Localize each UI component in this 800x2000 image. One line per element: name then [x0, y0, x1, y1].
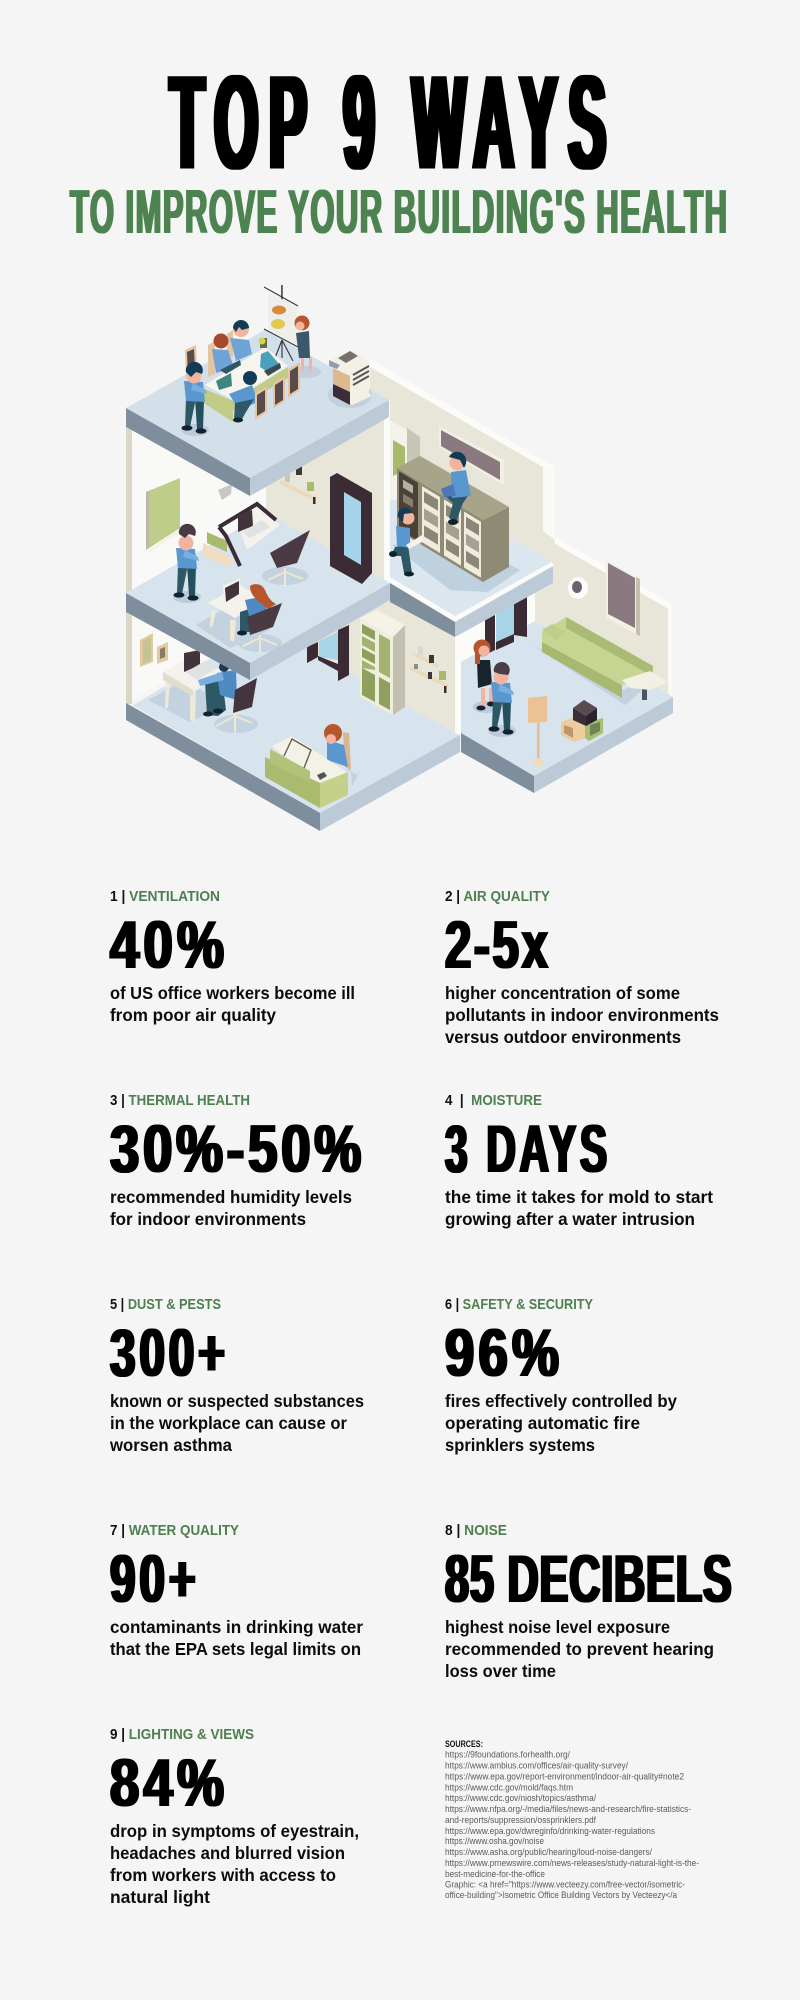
wall: second floor	[126, 340, 390, 593]
heading: 4 | MOISTURE	[445, 1092, 542, 1109]
stat: 40%	[110, 907, 224, 982]
description: contaminants in drinking water	[110, 1617, 363, 1637]
office chair: second floor	[238, 603, 282, 653]
floor: ground	[132, 625, 460, 813]
office chair: ground floor	[214, 678, 258, 733]
reception desk	[265, 724, 358, 808]
person: seated front	[229, 371, 258, 422]
wall pictures	[140, 633, 168, 667]
description	[445, 1187, 713, 1229]
description: highest noise level exposure	[445, 1617, 670, 1637]
description: recommended to prevent hearing	[445, 1639, 714, 1659]
sources: https://www.epa.gov/report-environment/indoor-air-quality#note2	[445, 1772, 684, 1782]
stat: 2-5x	[445, 908, 548, 983]
sources: office-building">Isometric Office Building Vectors by Vecteezy</a	[445, 1890, 678, 1901]
slab: second floor	[126, 583, 390, 680]
description: higher concentration of some	[445, 983, 680, 1003]
subtitle: TO IMPROVE YOUR BUILDING'S HEALTH	[70, 179, 727, 247]
meeting table	[202, 338, 288, 422]
description: that the EPA sets legal limits on	[110, 1639, 361, 1659]
door: second floor	[330, 473, 372, 584]
description	[445, 1617, 714, 1681]
floor: server room	[390, 470, 553, 617]
bookcase	[360, 610, 405, 715]
heading: 8 | NOISE	[445, 1522, 507, 1539]
wall: lounge white return	[461, 590, 535, 662]
sources: and-reports/suppression/ossprinklers.pdf	[445, 1815, 596, 1826]
heading: 2 | AIR QUALITY	[445, 888, 550, 905]
sofa	[532, 617, 653, 705]
description: headaches and blurred vision	[110, 1843, 345, 1863]
stat: 90+	[110, 1542, 196, 1617]
slab: lounge	[461, 697, 673, 793]
door: ground floor	[307, 625, 349, 681]
description: sprinklers systems	[445, 1435, 595, 1455]
stat: 30%-50%	[110, 1111, 361, 1186]
person: man with box in server room	[389, 508, 424, 576]
floor: lounge	[461, 621, 673, 776]
description: operating automatic fire	[445, 1413, 640, 1433]
sources: https://www.osha.gov/noise	[445, 1836, 544, 1847]
wall: top tan edge	[126, 426, 132, 436]
description: the time it takes for mold to start	[445, 1187, 713, 1207]
panel: 8 noise	[445, 1522, 732, 1681]
person: man standing top floor	[181, 362, 209, 436]
panel: 5 dust and pests	[109, 1296, 364, 1455]
description	[445, 1391, 677, 1455]
icon: wall clock lounge	[568, 577, 588, 599]
chairs: front row	[255, 362, 300, 420]
description: worsen asthma	[109, 1435, 232, 1455]
side table	[622, 671, 668, 700]
sources: https://9foundations.forhealth.org/	[445, 1750, 570, 1760]
person: man at ground floor desk	[198, 662, 237, 716]
presentation board	[264, 285, 298, 361]
description: natural light	[110, 1887, 210, 1907]
window: server room	[439, 426, 504, 485]
heading: 6 | SAFETY & SECURITY	[445, 1296, 593, 1313]
stat: 96%	[445, 1315, 559, 1390]
description	[110, 1821, 359, 1907]
description: from workers with access to	[110, 1865, 336, 1885]
sources: https://www.cdc.gov/mold/faqs.htm	[445, 1782, 573, 1794]
office chair: corner desk	[262, 530, 310, 586]
sources: SOURCES:	[445, 1739, 483, 1750]
sources: https://www.ambius.com/offices/air-quality-survey/	[445, 1760, 628, 1772]
icon: wall clock second floor	[218, 484, 232, 500]
stat: 85 DECIBELS	[445, 1542, 732, 1617]
window: green second floor	[146, 478, 180, 553]
description: fires effectively controlled by	[445, 1391, 677, 1411]
desk: second floor workstation	[196, 578, 270, 648]
sources	[445, 1739, 699, 1901]
heading: 3 | THERMAL HEALTH	[110, 1092, 250, 1109]
description	[110, 1617, 363, 1659]
description: known or suspected substances	[110, 1391, 364, 1411]
sources: https://www.asha.org/public/hearing/loud-noise-dangers/	[445, 1847, 652, 1858]
chairs: back row	[185, 330, 233, 378]
person: man standing second floor	[173, 524, 201, 603]
shadow: servers	[392, 540, 520, 592]
panel: 6 safety and security	[445, 1296, 677, 1455]
sources: https://www.nfpa.org/-/media/files/news-and-research/fire-statistics-	[445, 1804, 691, 1815]
stat: 300+	[110, 1316, 225, 1391]
description	[109, 1391, 364, 1455]
heading: 7 | WATER QUALITY	[110, 1522, 239, 1539]
description: loss over time	[445, 1661, 556, 1681]
description: of US office workers become ill	[110, 983, 355, 1003]
heading: 5 | DUST & PESTS	[110, 1296, 221, 1313]
heading: 9 | LIGHTING & VIEWS	[110, 1726, 254, 1743]
storage cubes	[561, 700, 603, 742]
wall shelf: ground floor	[410, 646, 448, 693]
description: growing after a water intrusion	[445, 1209, 695, 1229]
panel: 3 thermal health	[110, 1092, 361, 1229]
wall: ground floor	[126, 480, 461, 735]
door: lounge	[485, 596, 527, 655]
wall: lower right lounge	[535, 525, 672, 698]
description: in the workplace can cause or	[110, 1413, 347, 1433]
sources: Graphic: <a href="https://www.vecteezy.com/free-vector/isometric-	[445, 1880, 685, 1890]
server racks	[397, 456, 509, 582]
sources: https://www.cdc.gov/niosh/topics/asthma/	[445, 1793, 596, 1804]
stat: 3 DAYS	[445, 1111, 607, 1187]
description: versus outdoor environments	[445, 1027, 681, 1047]
printer	[328, 350, 372, 408]
person: man sitting on server	[441, 452, 471, 525]
person: presenter	[293, 316, 321, 378]
sources: https://www.prnewswire.com/news-releases/study-natural-light-is-the-	[445, 1858, 699, 1869]
wall: upper right server room	[370, 359, 555, 577]
sources: best-medicine-for-the-office	[445, 1869, 545, 1880]
panel: 4 moisture	[445, 1092, 713, 1229]
slab: ground floor	[126, 703, 460, 831]
description: from poor air quality	[110, 1005, 276, 1025]
panel: 2 air quality	[445, 888, 719, 1047]
window: lounge wall	[606, 560, 640, 636]
corner desk	[219, 504, 280, 566]
panel: 7 water quality	[110, 1522, 363, 1659]
description	[110, 1187, 352, 1229]
slab: server room	[390, 564, 553, 637]
description: pollutants in indoor environments	[445, 1005, 719, 1025]
people: woman and man talking	[473, 640, 516, 737]
stat: 84%	[110, 1745, 224, 1820]
people: seated at table	[212, 320, 252, 374]
description	[445, 983, 719, 1047]
desk: ground floor workstation	[148, 650, 225, 722]
planter	[203, 532, 232, 568]
description	[110, 983, 355, 1025]
closet: server room	[390, 420, 420, 500]
illustration: isometric office building	[126, 285, 673, 831]
panel: 1 ventilation	[110, 888, 355, 1025]
wall shelf: second floor	[280, 466, 316, 504]
title: TOP 9 WAYS	[170, 47, 606, 197]
heading: 1 | VENTILATION	[110, 888, 220, 905]
description: recommended humidity levels	[110, 1187, 352, 1207]
description: drop in symptoms of eyestrain,	[110, 1821, 359, 1841]
slab: top floor	[126, 330, 389, 496]
floor lamp	[528, 696, 547, 768]
sources: https://www.epa.gov/dwreginfo/drinking-water-regulations	[445, 1826, 655, 1837]
panel: 9 lighting and views	[110, 1726, 359, 1907]
floor: second	[126, 513, 390, 663]
description: for indoor environments	[110, 1209, 306, 1229]
person: woman at desk	[237, 584, 276, 636]
